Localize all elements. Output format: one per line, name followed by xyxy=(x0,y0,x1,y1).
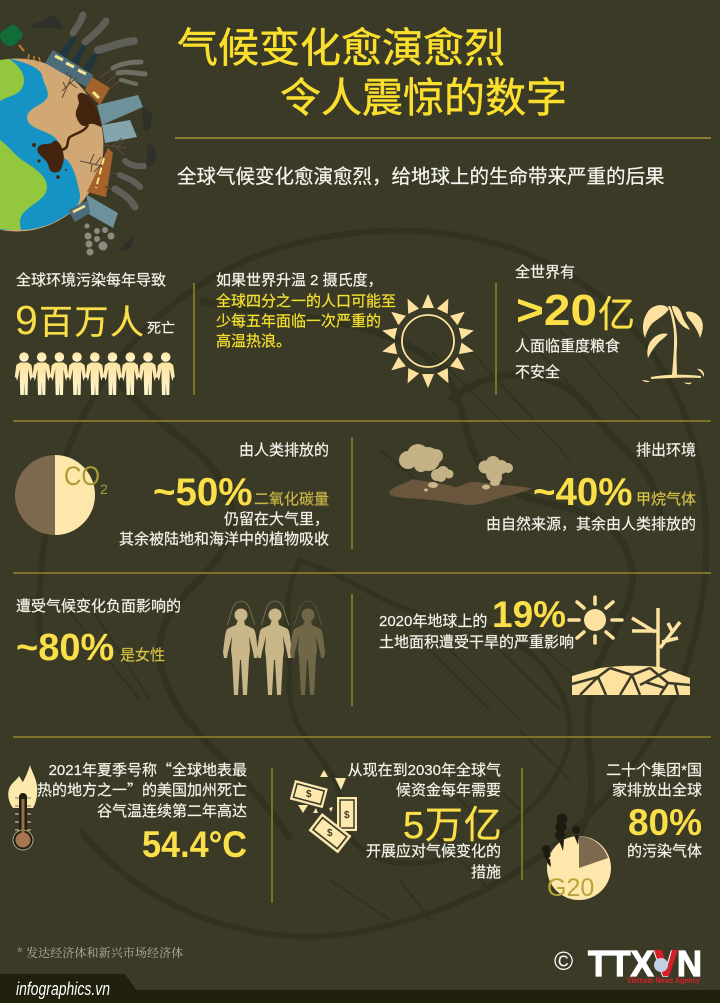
stat: 9 million deaths: 死亡 xyxy=(147,320,175,336)
stat: heatwaves: 如果世界升温 2 摄氏度， xyxy=(216,272,383,289)
stat: methane 40%: 甲烷气体 xyxy=(636,491,696,508)
section dividers xyxy=(13,283,711,903)
stat: heatwaves: 少每五年面临一次严重的 xyxy=(216,313,381,330)
stat: 9 million deaths xyxy=(15,271,175,395)
icon: money bills: $ xyxy=(306,789,312,800)
stat: G20 80%: 的污染气体 xyxy=(627,843,702,860)
stat: food insecurity: >20 xyxy=(516,286,597,335)
footer bar: infographics.vn xyxy=(16,979,110,999)
title: 令人震惊的数字 xyxy=(280,75,567,121)
stat: 9 million deaths: 百万人 xyxy=(39,304,146,342)
footer bar xyxy=(0,974,720,1003)
stat: drought 19%: 2020年地球上的 xyxy=(379,613,487,630)
subtitle: 全球气候变化愈演愈烈，给地球上的生命带来严重的后果 xyxy=(177,166,665,188)
watermark globe xyxy=(39,231,706,937)
title xyxy=(177,25,567,121)
stat: G20 80%: 80% xyxy=(628,802,702,843)
footnote: * 发达经济体和新兴市场经济体 xyxy=(17,944,183,961)
tree xyxy=(0,25,24,51)
stat: CO2 50%: 二氧化碳量 xyxy=(254,491,329,508)
stat: methane 40%: ~40% xyxy=(533,471,633,514)
stat: food insecurity: 不安全 xyxy=(515,363,560,381)
stat: climate finance: 开展应对气候变化的 xyxy=(366,842,501,860)
stat: food insecurity: 全世界有 xyxy=(515,263,575,281)
stat: CO2 50%: 由人类排放的 xyxy=(239,442,329,459)
stat: climate finance: 候资金每年需要 xyxy=(396,782,501,799)
icon: thermometer with flame xyxy=(8,765,37,850)
stat: drought 19% xyxy=(379,594,690,695)
stat: death valley temperature: 热的地方之一”的美国加州死亡 xyxy=(37,779,247,800)
chart: G20 pie with smoke xyxy=(542,814,611,902)
icon: money bills: $ xyxy=(344,810,350,821)
stat: drought 19%: 19% xyxy=(492,594,566,635)
title divider xyxy=(175,137,711,139)
stat: heatwaves: 高温热浪。 xyxy=(216,333,291,350)
icon: wilting plant xyxy=(642,305,704,384)
icon: three women xyxy=(223,601,325,695)
stat: G20 80% xyxy=(542,762,702,902)
stat: climate finance: 从现在到2030年全球气 xyxy=(348,761,501,779)
stat: drought 19%: 土地面积遭受干旱的严重影响 xyxy=(379,634,574,651)
stat: women 80%: 遭受气候变化负面影响的 xyxy=(16,598,181,615)
stat: CO2 50%: 仍留在大气里， xyxy=(224,511,329,528)
factories xyxy=(45,35,143,228)
stat: women 80%: ~80% xyxy=(16,627,114,669)
stat: climate finance xyxy=(290,761,503,881)
stat: death valley temperature: 54.4°C xyxy=(142,824,247,865)
stat: CO2 50% xyxy=(15,442,329,548)
oil spill xyxy=(32,93,101,179)
stat: 9 million deaths: 全球环境污染每年导致 xyxy=(16,271,166,289)
icon: money bills: $ xyxy=(327,828,333,839)
dark clouds xyxy=(31,16,157,251)
stat: CO2 50%: 其余被陆地和海洋中的植物吸收 xyxy=(119,530,329,548)
icon: emitting ground xyxy=(389,444,532,505)
stat: death valley temperature: 谷气温连续第二年高达 xyxy=(97,802,247,820)
stat: climate finance: 措施 xyxy=(471,864,501,881)
icon: sun xyxy=(381,294,475,388)
stat: G20 80%: 二十个集团*国 xyxy=(606,762,702,779)
stat: heatwaves: 全球四分之一的人口可能至 xyxy=(216,292,396,310)
stat: G20 80%: 家排放出全球 xyxy=(612,781,702,799)
logo: TTXVN: © xyxy=(554,946,573,976)
stat: food insecurity xyxy=(515,263,704,384)
dead trees xyxy=(62,72,126,172)
stat: CO2 50%: ~50% xyxy=(153,471,253,514)
chart: CO2 pie xyxy=(15,455,108,535)
stat: women 80% xyxy=(16,598,325,695)
stat: climate finance: 5万亿 xyxy=(403,805,503,847)
stat: food insecurity: 亿 xyxy=(598,294,635,335)
stat: death valley temperature: 2021年夏季号称“全球地表最 xyxy=(49,759,247,780)
icon: nine people xyxy=(15,352,175,395)
smoke xyxy=(73,15,145,207)
illustration: polluted planet xyxy=(0,15,157,256)
title: 气候变化愈演愈烈 xyxy=(177,25,505,71)
chart: CO2 pie: 2 xyxy=(100,481,108,497)
stat: 9 million deaths: 9 xyxy=(15,297,38,343)
icon: sun, dead tree and cracked earth xyxy=(569,597,690,695)
logo: TTXVN: Vietnam News Agency xyxy=(627,976,700,985)
stat: methane 40% xyxy=(389,441,696,533)
stat: death valley temperature xyxy=(8,759,247,865)
planet xyxy=(0,58,104,232)
stat: methane 40%: 排出环境 xyxy=(636,441,696,459)
stat: heatwaves xyxy=(216,272,475,388)
chart: CO2 pie: CO xyxy=(64,461,100,491)
logo: TTXVN: TTXVN xyxy=(588,943,702,984)
stat: methane 40%: 由自然来源，其余由人类排放的 xyxy=(486,515,696,533)
stat: food insecurity: 人面临重度粮食 xyxy=(515,338,620,355)
icon: money bills xyxy=(290,770,357,853)
stat: women 80%: 是女性 xyxy=(120,646,165,664)
chart: G20 pie with smoke: G20 xyxy=(547,874,594,902)
